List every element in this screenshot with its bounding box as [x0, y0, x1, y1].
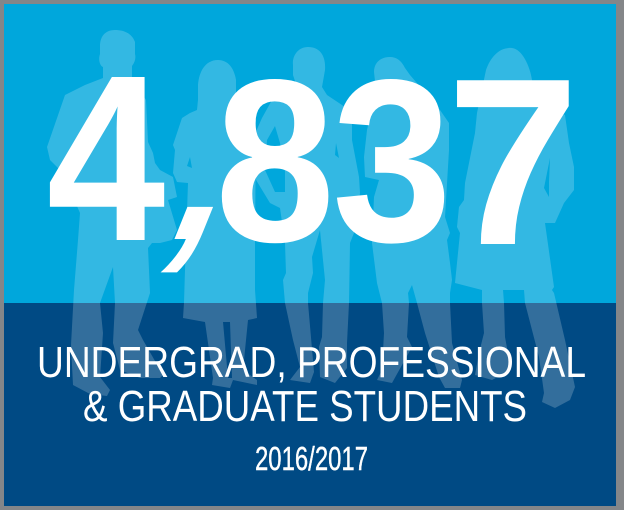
- headline number: 4,837: 4: [47, 26, 165, 290]
- headline number: 4,837: 8: [215, 32, 335, 291]
- headline number: 4,837: ,: [143, 45, 291, 285]
- silhouette: man at far left: [47, 30, 177, 396]
- panel: lower navy background: [4, 303, 616, 506]
- silhouette: man in the centre: [250, 47, 360, 383]
- caption: student categories: [37, 339, 586, 431]
- silhouette: woman at far right: [455, 48, 575, 408]
- caption: student categories: & GRADUATE STUDENTS: [83, 383, 527, 431]
- silhouette: woman second from left: [173, 60, 257, 388]
- headline number: 4,837: [47, 26, 579, 295]
- caption: academic year: 2016/2017: [255, 440, 368, 477]
- silhouette: woman second from right: [364, 57, 462, 388]
- headline number: 4,837: 3: [332, 32, 452, 291]
- panel: upper sky-blue background: [4, 4, 616, 303]
- illustration: silhouettes of five students: [47, 30, 575, 408]
- headline number: 4,837: 7: [447, 30, 579, 295]
